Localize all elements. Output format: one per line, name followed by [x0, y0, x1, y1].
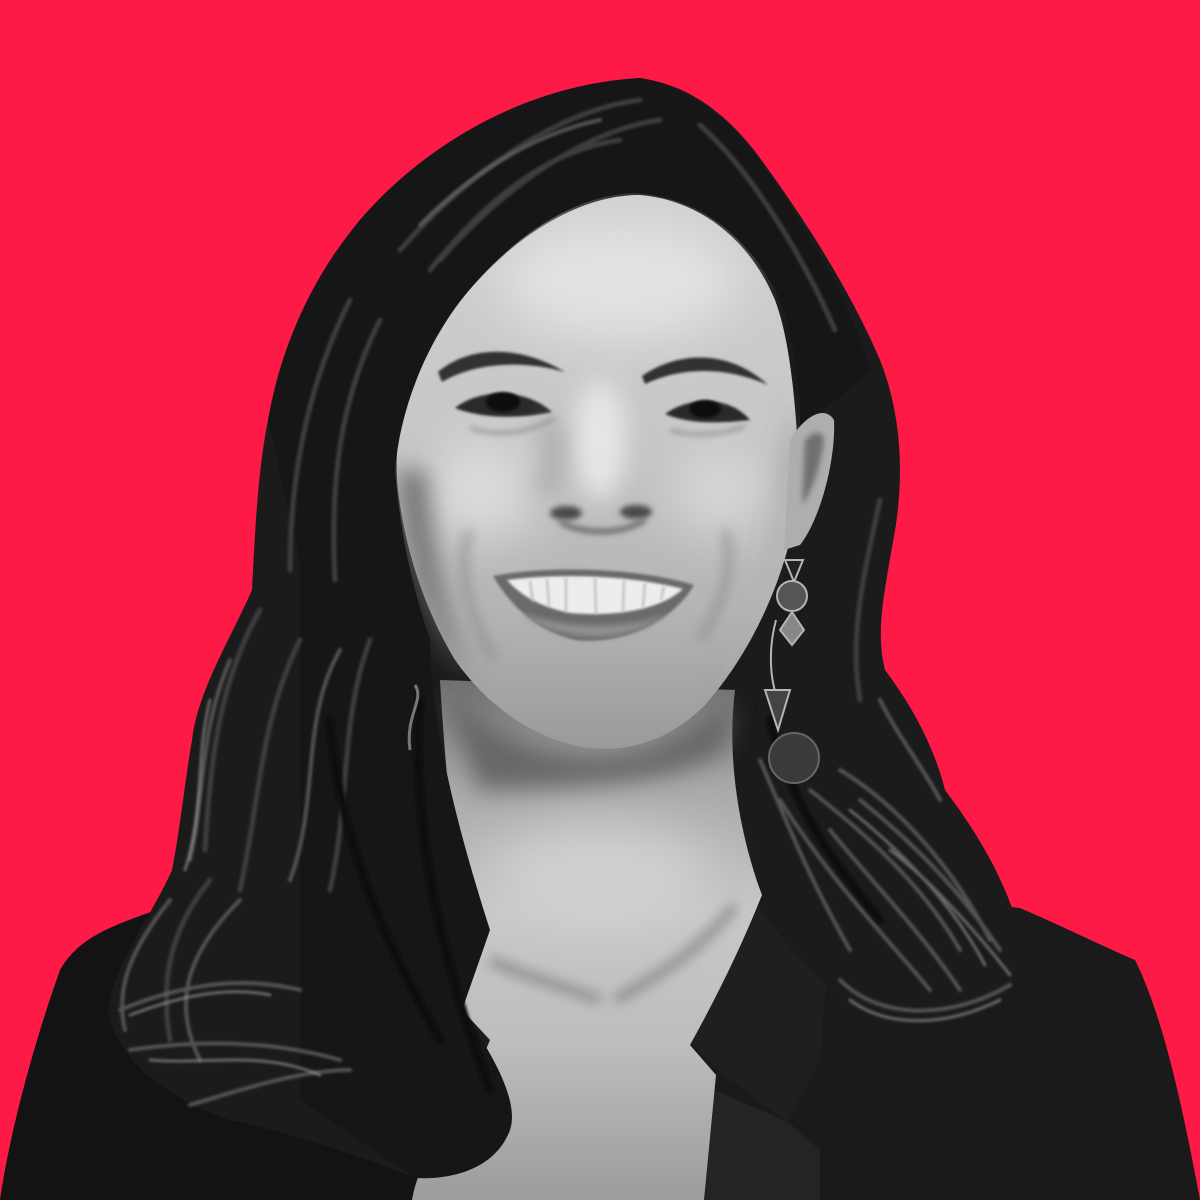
earring	[765, 560, 819, 783]
forehead highlight	[500, 220, 740, 340]
face side shading	[398, 470, 470, 680]
ear	[784, 413, 834, 550]
hair back mass	[108, 78, 1025, 1178]
neck shadow	[445, 690, 735, 790]
cheek highlights	[425, 440, 535, 540]
hair highlights	[120, 100, 1010, 1105]
neck and chest	[412, 680, 762, 1200]
face	[397, 195, 798, 749]
nose	[542, 380, 652, 532]
smile	[464, 530, 729, 660]
hair front over the forehead	[268, 78, 899, 1178]
jacket lapel	[690, 905, 826, 1200]
jacket	[0, 880, 1200, 1200]
small left earring	[409, 685, 418, 750]
eyes	[455, 392, 750, 434]
eyebrows	[438, 352, 768, 385]
